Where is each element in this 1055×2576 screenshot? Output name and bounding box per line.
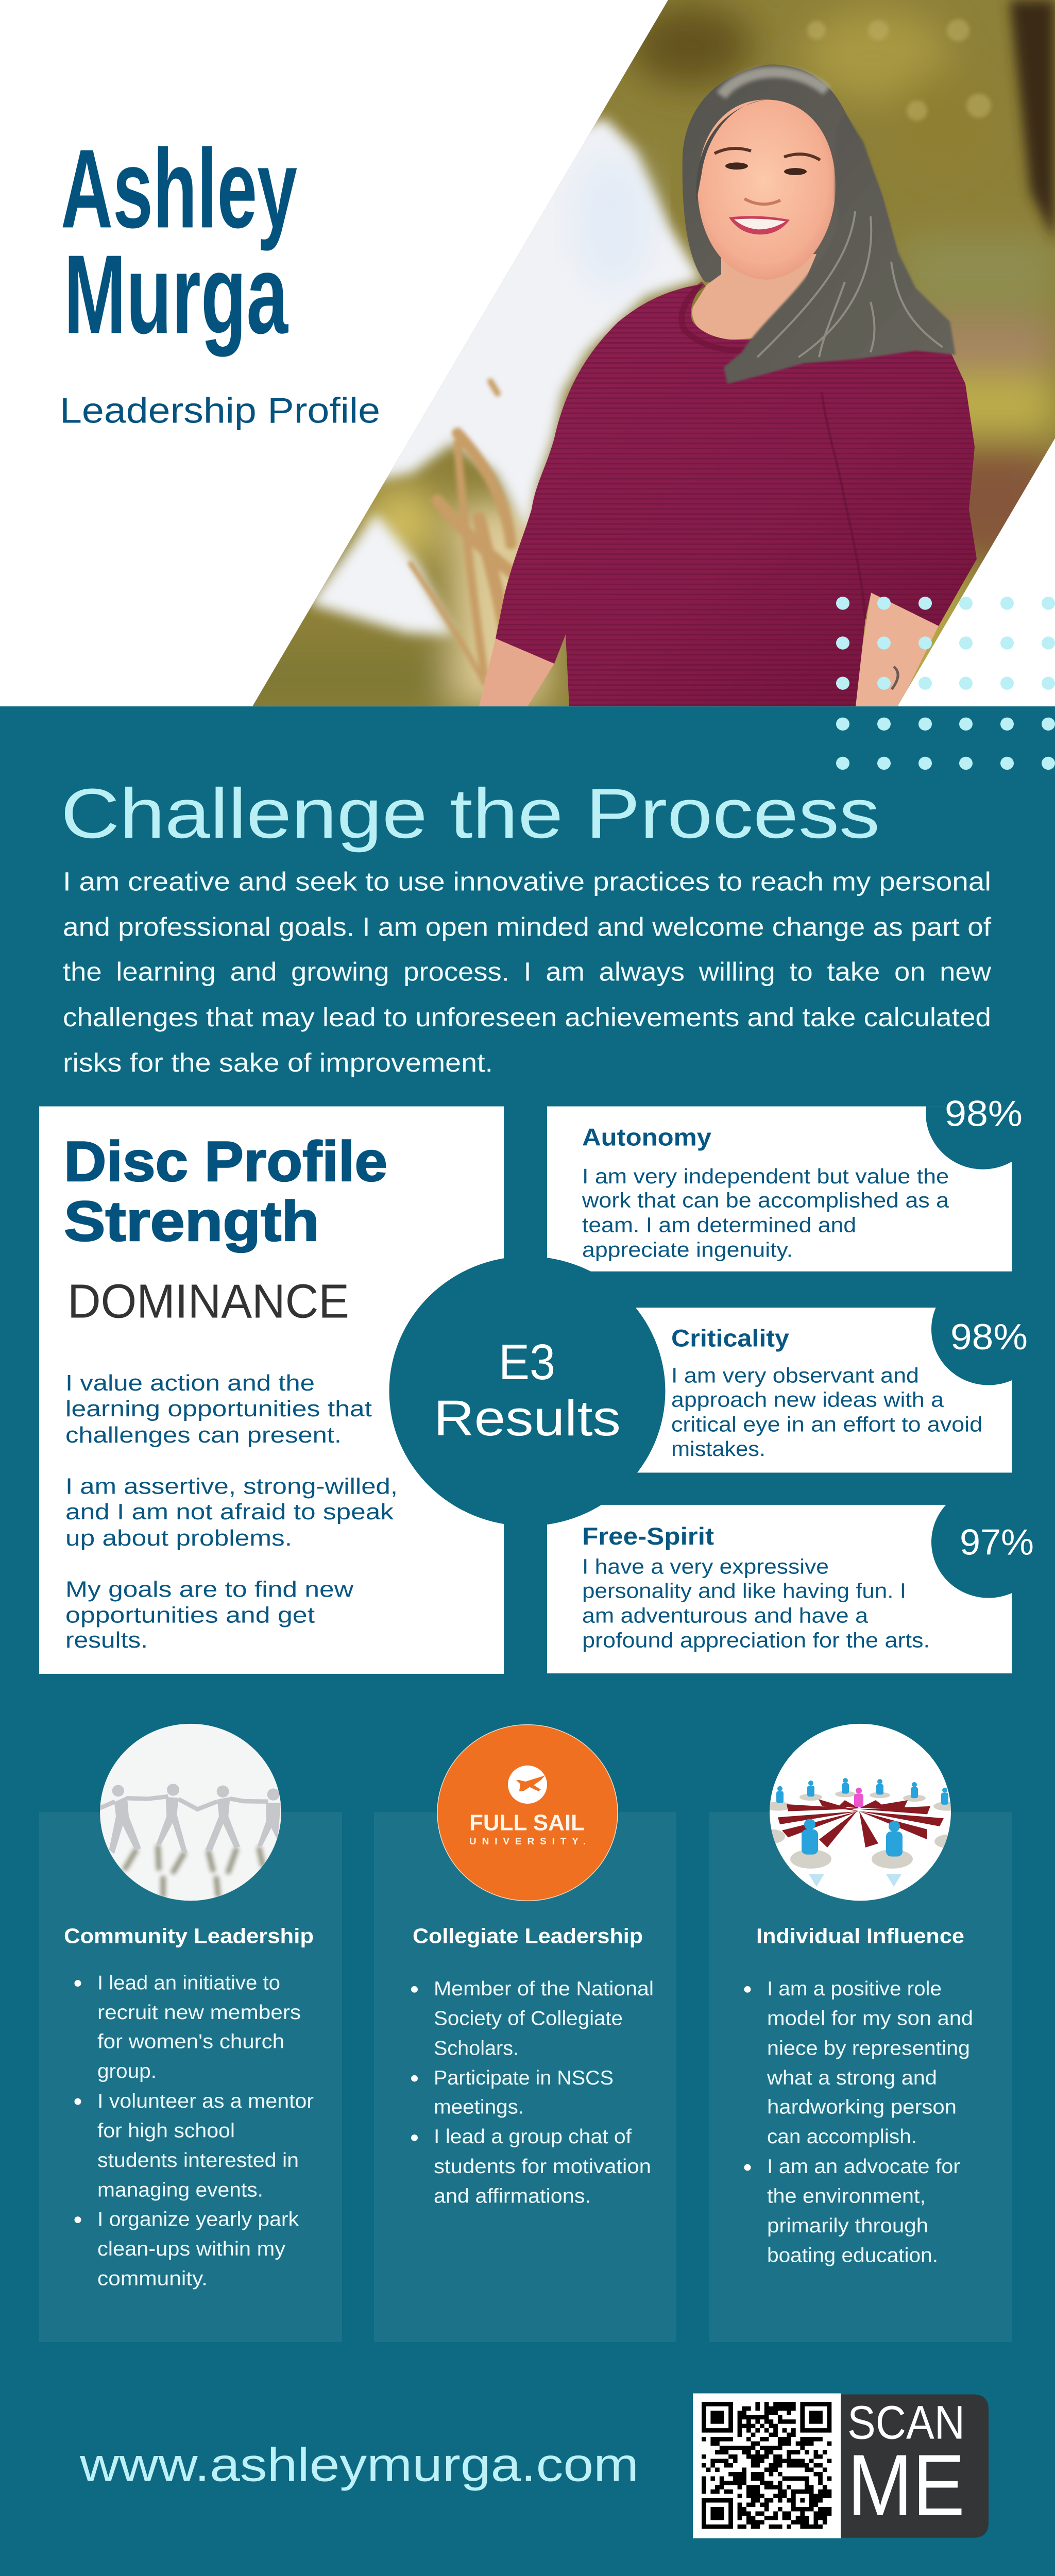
title: name: Murga [64,231,288,357]
title: name: Ashley [61,126,297,251]
page background: teal [0,706,1055,2576]
photo: hair behind head [683,65,897,290]
bullet list: collegiate [411,1977,654,2207]
bullet list: community: for women's church [97,2030,284,2053]
text block: intro paragraph: I am creative and seek to use innovative practices to reach my personal [63,867,991,896]
heading: Free-Spirit: Free-Spirit [582,1523,714,1550]
panel: Individual Influence [709,1724,1012,2342]
text block: intro paragraph: risks for the sake of improvement. [63,1048,493,1077]
photo: neck [692,254,816,340]
text block: dominance description: I value action and the [65,1371,315,1396]
text block: dominance description: results. [65,1628,148,1653]
heading: Collegiate Leadership: Collegiate Leadership [413,1924,643,1947]
text block: dominance description: learning opportunities that [65,1396,372,1421]
text block: intro paragraph: the learning and growing process. I am always willing to take on new [63,957,992,986]
text block: dominance description: I am assertive, strong-willed, [65,1474,398,1499]
subheading: Dominance: DOMINANCE [67,1275,349,1328]
bullet list: collegiate: I lead a group chat of [434,2126,632,2148]
heading: Autonomy: Autonomy [582,1124,712,1151]
paper chain figures [99,1784,281,1854]
text block: intro paragraph: challenges that may lead to unforeseen achievements and take calculated [63,1003,991,1032]
percent badge circle [931,1486,1046,1598]
icon: paper chain people [99,1724,281,1901]
heading: Disc Profile Strength [64,1130,387,1253]
bullet list: community: I volunteer as a mentor [97,2090,314,2112]
text block: intro paragraph: and professional goals. I am open minded and welcome change as part of [63,912,992,941]
panel: Disc Profile Strength [39,1106,504,1674]
icon: Full Sail University logo [437,1725,618,1901]
blue people [776,1778,948,1887]
bullet list: community: for high school [97,2120,235,2142]
photo: Ashley Murga portrait [227,0,1055,706]
hexagonal bases [760,1791,963,1869]
paper chain shadows [125,1848,263,1895]
center circle: E3 Results: Results [434,1390,621,1446]
text block: Autonomy description: team. I am determined and [582,1213,856,1236]
bullet list: individual: I am a positive role [767,1977,942,2000]
photo: burgundy ribbed sweater [496,284,977,706]
text block: Autonomy description: appreciate ingenuity. [582,1238,793,1261]
pink center person [854,1788,863,1807]
text block: dominance description: My goals are to find new [65,1577,354,1602]
text: SCAN: SCAN [847,2396,965,2449]
text block: Criticality description: I am very observant and [671,1363,919,1387]
QR code [702,2402,831,2529]
decorative dots grid [836,597,1055,770]
heading: Community Leadership: Community Leadership [64,1924,314,1947]
panel: Autonomy [547,1094,1023,1272]
heading: Criticality: Criticality [671,1325,790,1352]
bullet list: community: clean-ups within my [97,2238,285,2260]
red radiating arrows [778,1799,944,1848]
percent badge circle [926,1106,1012,1170]
bullet list: collegiate: Scholars. [434,2037,519,2059]
text block: Free-Spirit description [582,1554,930,1652]
bullet list: individual: I am an advocate for [767,2155,960,2178]
photo: white pampas plume [309,118,702,635]
bullet list: individual: can accomplish. [767,2126,917,2148]
photo: dark tree trunk [1010,0,1055,242]
text block: Autonomy description [582,1164,949,1261]
center circle: E3 Results: E3 [499,1334,555,1390]
text block: dominance description [65,1371,398,1653]
text block: Free-Spirit description: profound appreciation for the arts. [582,1628,930,1652]
photo: smile [729,216,790,234]
photo: eyes [725,162,807,175]
panel: Free-Spirit [547,1486,1046,1673]
plane silhouette [516,1775,545,1791]
bullet list: collegiate: Member of the National [434,1977,654,2000]
bullet list: individual [744,1977,973,2267]
photo: golden wheat stems [411,381,518,683]
photo: face [696,99,836,280]
bullet list: individual: hardworking person [767,2096,957,2118]
panel: Collegiate Leadership [374,1725,676,2342]
bullet list: collegiate: and affirmations. [434,2185,591,2207]
text block: Free-Spirit description: personality and like having fun. I [582,1579,906,1602]
bullet list: community: I organize yearly park [97,2208,299,2230]
percent badge circle [931,1274,1046,1385]
icon: Full Sail University logo: FULL SAIL [469,1810,585,1836]
heading: Individual Influence: Individual Influence [756,1924,964,1947]
value: 97%: 97% [960,1522,1034,1563]
subtitle: Leadership Profile [60,390,380,430]
bullet list: community: managing events. [97,2179,263,2201]
text block: dominance description: up about problems. [65,1526,292,1551]
icon: network of people with arrows [760,1724,963,1901]
bullet list: individual: niece by representing [767,2037,970,2059]
bullet list: collegiate: meetings. [434,2096,524,2118]
bullet list: individual: what a strong and [767,2066,937,2089]
bullet list: collegiate: students for motivation [434,2155,651,2178]
panel: Community Leadership [39,1724,342,2342]
bullet list: individual: the environment, [767,2185,926,2207]
scan me dark label [824,2394,989,2538]
text block: Free-Spirit description: I have a very expressive [582,1554,829,1579]
text block: dominance description: challenges can present. [65,1422,342,1448]
text block: Criticality description [671,1363,982,1461]
icon: Full Sail University logo: UNIVERSITY. [469,1836,586,1846]
text block: Free-Spirit description: am adventurous and have a [582,1603,869,1627]
text block: dominance description: and I am not afraid to speak [65,1500,394,1524]
QR code background [693,2394,841,2538]
photo: blue shade on plume [577,156,649,287]
text block: dominance description: opportunities and get [65,1603,315,1628]
photo background foliage [227,5,1055,706]
photo: hair strand framing left of face [696,99,766,201]
bullet list: collegiate: Society of Collegiate [434,2007,623,2030]
bullet list: individual: boating education. [767,2244,938,2267]
bullet list: collegiate: Participate in NSCS [434,2066,614,2089]
title: name [61,126,297,357]
heading: Challenge the Process: Challenge the Process [61,774,880,853]
text block: Autonomy description: I am very independent but value the [582,1164,949,1188]
value: 98%: 98% [945,1094,1023,1134]
scan me block [693,2394,989,2538]
text block: Criticality description: mistakes. [671,1437,765,1461]
photo: sunlit bokeh spots [807,19,991,121]
bullet list: community: recruit new members [97,2001,301,2024]
bullet list: community: community. [97,2267,208,2290]
photo base colour [227,0,1055,706]
bullet list: community: I lead an initiative to [97,1972,280,1994]
heading: Disc Profile Strength: Disc Profile [64,1130,387,1193]
photo: long grey hair over shoulder [721,72,956,384]
website url: www.ashleymurga.com [79,2438,639,2491]
heading: Disc Profile Strength: Strength [64,1190,319,1253]
value: 98%: 98% [950,1317,1028,1358]
photo: nose [744,199,780,204]
center circle: E3 Results [389,1256,666,1526]
photo: eyebrows [714,148,820,160]
text block: intro paragraph [63,867,992,1077]
bullet list: community: group. [97,2060,157,2082]
bullet list: community [74,1972,314,2290]
text block: Criticality description: critical eye in an effort to avoid [671,1412,982,1436]
text block: Autonomy description: work that can be accomplished as a [582,1188,949,1212]
bullet list: community: students interested in [97,2149,299,2172]
text block: Criticality description: approach new ideas with a [671,1387,944,1411]
bullet list: individual: primarily through [767,2214,928,2237]
panel: Criticality [618,1274,1046,1472]
photo: arms [479,592,939,706]
text: ME: ME [847,2437,965,2534]
bullet list: individual: model for my son and [767,2007,973,2030]
